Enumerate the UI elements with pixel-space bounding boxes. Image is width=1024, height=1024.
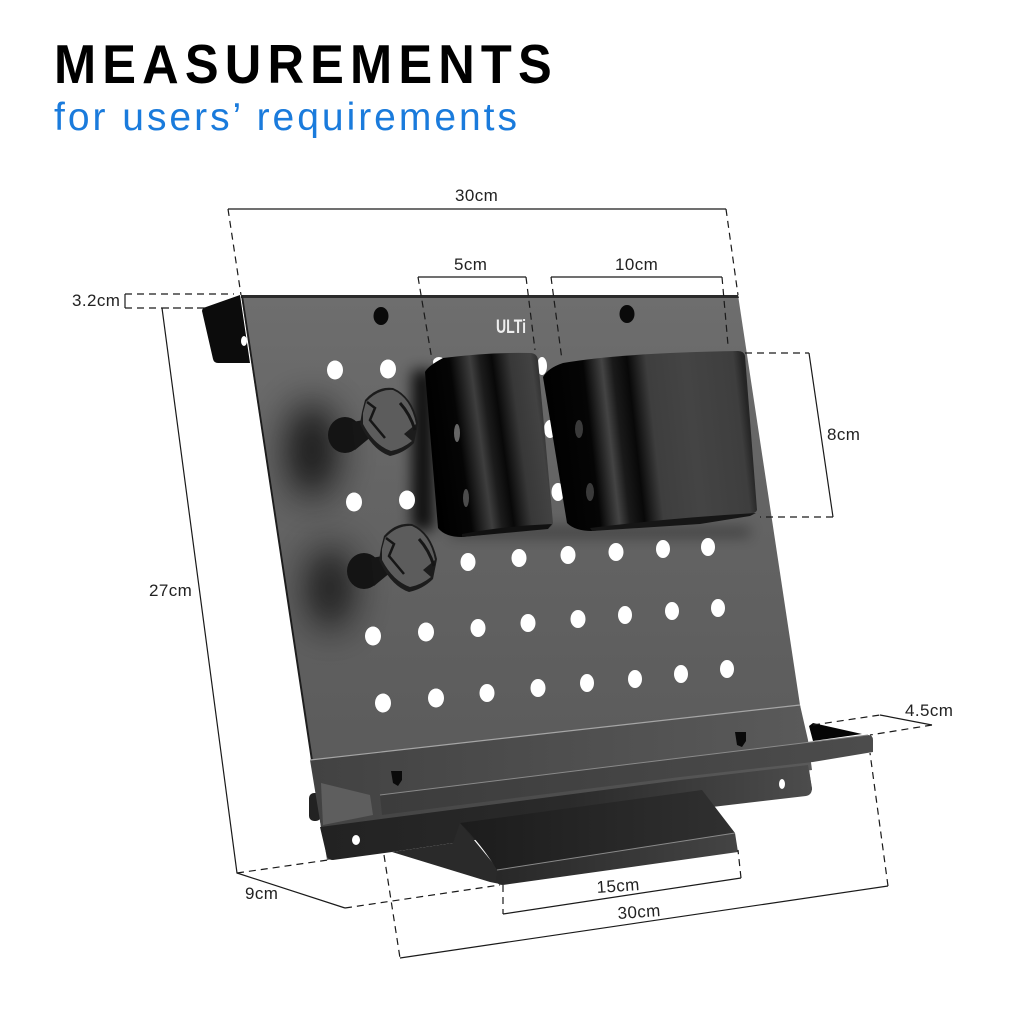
tray back wall: [310, 705, 812, 827]
hook knob: [328, 417, 362, 453]
top left bracket: [202, 295, 250, 363]
bracket hole: [241, 336, 247, 346]
title: MEASUREMENTS: [54, 34, 552, 95]
large cup: 10cm: [543, 351, 757, 531]
product: pegboard organiser: [202, 295, 873, 885]
dashed guides: [125, 209, 932, 958]
stand top face: [460, 790, 735, 870]
reflected holes: [575, 420, 583, 438]
hook shaft: [371, 556, 391, 586]
cup body: [543, 351, 757, 531]
plate top edge: [241, 295, 739, 298]
stand front: [496, 833, 738, 885]
hook slots: [367, 402, 385, 438]
hook shaft: [352, 420, 372, 450]
label: top width: 30cm: [455, 186, 498, 205]
rear right tray bracket: [809, 723, 862, 741]
label: tray depth: 4.5cm: [905, 701, 953, 720]
label: base depth: 9cm: [245, 884, 278, 903]
tray highlight: [310, 705, 800, 760]
hook disc base: [360, 388, 418, 456]
tray front lip: [380, 735, 873, 815]
hook slots: [386, 538, 404, 574]
hook disc face: [382, 526, 435, 587]
cup bottom rim: [590, 513, 756, 531]
lower screw holes: [352, 779, 785, 845]
label: large cup width: 10cm: [615, 255, 658, 274]
hook disc base: [379, 524, 437, 592]
corner gusset: [321, 783, 373, 825]
label: stand width: 15cm: [596, 875, 640, 897]
hook knob: [347, 553, 381, 589]
tray key slots: [391, 732, 746, 786]
label: small cup width: 5cm: [454, 255, 487, 274]
dimension lines: [125, 209, 932, 958]
label: cup height: 8cm: [827, 425, 860, 444]
peg holes: [327, 357, 734, 712]
hook slot right: [400, 403, 415, 430]
mounting holes: [374, 305, 634, 325]
infographic canvas: [54, 44, 952, 959]
label: height: 27cm: [149, 581, 192, 600]
cup body: [425, 353, 553, 537]
back plate: [241, 295, 812, 860]
label: thickness: 3.2cm: [72, 291, 120, 310]
hook: upper: [328, 388, 418, 456]
hook: lower: [347, 524, 437, 592]
lower strip: [320, 765, 812, 860]
subtitle: for users’ requirements: [54, 96, 517, 139]
stand side: [392, 823, 500, 884]
small cup: 5cm: [425, 353, 553, 537]
plate left edge: [241, 295, 323, 827]
solid rules: [125, 209, 932, 958]
label: bottom width: 30cm: [617, 901, 661, 923]
soft shadows: [286, 370, 750, 630]
reflected holes: [454, 424, 460, 442]
lip highlight: [380, 735, 868, 795]
stand highlight: [497, 833, 735, 870]
ULTi logo: ULTi: [496, 317, 526, 338]
dimension labels: [72, 186, 953, 923]
hook slot right: [419, 539, 434, 566]
rear bolt bump: [309, 793, 321, 821]
hook disc face: [363, 390, 416, 451]
cup bottom rim: [462, 524, 552, 537]
